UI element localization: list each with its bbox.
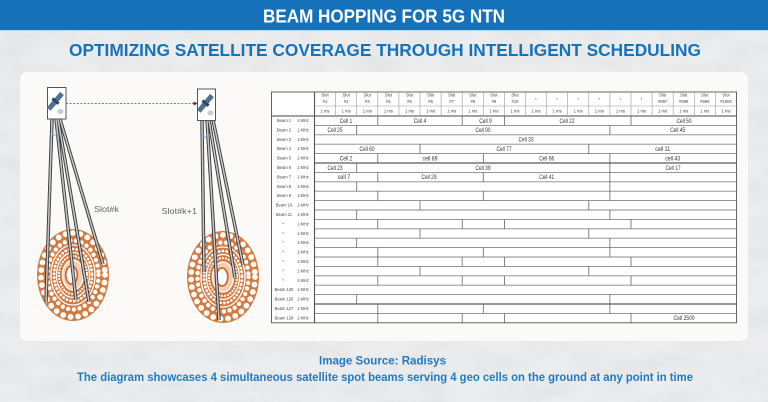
table cell assignments: Cell 60 <box>360 147 375 153</box>
table header: slots: 1 ms <box>595 108 604 114</box>
table header: slots: #1000 <box>720 99 732 104</box>
table cell assignments: Cell 41 <box>539 175 555 181</box>
arrow: satellite movement <box>66 102 198 106</box>
table row labels: beams: 1 MHz <box>297 156 309 161</box>
table header: slots: 1 ms <box>679 108 688 114</box>
table header: slots: Slot <box>722 92 730 98</box>
caption: The diagram showcases 4 simultaneous satellite spot beams serving 4 geo cells on the ground at any point in time <box>77 372 693 384</box>
icon: satellite at slot k+1 <box>196 89 216 120</box>
table header: slots: 1 ms <box>489 108 498 114</box>
table header: slots: 1 ms <box>342 108 351 114</box>
table header: slots: #4 <box>386 99 391 104</box>
table header: slots <box>320 92 732 114</box>
table cell assignments: Cell 1 <box>340 119 353 125</box>
table row labels: beams: 1 MHz <box>297 221 309 226</box>
table cell assignments: Cell 66 <box>539 156 555 162</box>
panel: satellite coverage diagram <box>37 88 259 323</box>
table row labels: beams: Beam 3 <box>277 137 292 142</box>
table row labels: beams: Beam 5 <box>277 156 292 161</box>
satellite caption right: SAT <box>201 134 212 140</box>
table header: slots: 1 ms <box>616 108 625 114</box>
table row labels: beams: 1 MHz <box>297 231 309 236</box>
table header: slots: #7 <box>449 99 455 104</box>
table cell assignments: Cell 22 <box>560 119 575 125</box>
table row labels: beams: Beam 125 <box>275 287 294 292</box>
beams: slot k+1 <box>202 120 243 320</box>
table row labels: beams: 1 MHz <box>297 259 309 264</box>
table cell assignments: Cell 25 <box>328 128 343 134</box>
table cell assignments: cell 11 <box>655 147 671 153</box>
table cell assignments <box>328 119 695 322</box>
table header: slots: 1 ms <box>363 108 372 114</box>
table cell assignments: Cell 2 <box>340 156 353 162</box>
table cell assignments: cell 7 <box>338 175 351 181</box>
table row labels: beams: 1 MHz <box>297 193 309 198</box>
table row labels: beams: Beam 10 <box>276 203 293 208</box>
table cell assignments: cell 43 <box>665 156 681 162</box>
table row labels: beams: 1 MHz <box>297 297 309 302</box>
table row labels: beams: 1 MHz <box>297 184 309 189</box>
table header: slots: Slot <box>680 92 688 98</box>
table header: slots: * <box>641 97 643 102</box>
table header: slots: Slot <box>511 92 519 98</box>
table header: slots: 1 ms <box>426 108 435 114</box>
table header: slots: 1 ms <box>320 108 330 114</box>
table cell assignments: Cell 33 <box>518 138 534 144</box>
table header: slots: 1 ms <box>637 108 646 114</box>
table header: slots: #999 <box>700 99 710 104</box>
table header: slots: 1 ms <box>447 108 456 114</box>
table header: slots: Slot <box>385 92 393 98</box>
table header: slots: 1 ms <box>721 108 731 114</box>
table cell assignments: Cell 9 <box>479 119 492 125</box>
table header: slots: Slot <box>701 92 709 98</box>
table cell assignments: Cell 2500 <box>674 316 695 322</box>
table header: slots: Slot <box>659 92 667 98</box>
table row labels: beams: Beam 4 <box>277 146 292 151</box>
table row labels: beams: 1 MHz <box>297 127 309 132</box>
table header: slots: Slot <box>448 92 456 98</box>
table header: slots: * <box>598 97 600 102</box>
table row labels: beams: Beam 1 <box>277 118 292 123</box>
table header: slots: 1 ms <box>468 108 477 114</box>
table header: slots: Slot <box>343 92 351 98</box>
icon: satellite at slot k <box>46 88 66 119</box>
table header: slots: 1 ms <box>574 108 583 114</box>
table row labels: beams: Beam 8 <box>277 184 292 189</box>
table header: slots: Slot <box>364 92 372 98</box>
table row labels: beams: 1 MHz <box>297 250 309 255</box>
table row labels: beams: 1 MHz <box>297 118 309 123</box>
table row labels: beams: * <box>282 231 284 236</box>
table row labels: beams: 1 MHz <box>297 203 309 208</box>
table row labels: beams: 1 MHz <box>297 268 309 273</box>
table header: slots: * <box>535 97 537 102</box>
table header: slots: #10 <box>512 99 519 104</box>
table header: slots: Slot <box>490 92 498 98</box>
table header: slots: * <box>577 97 579 102</box>
table header: slots: #997 <box>658 99 668 104</box>
satellite caption left: SAT <box>51 132 62 138</box>
table row labels: beams: * <box>282 221 284 226</box>
table row labels: beams: * <box>282 250 284 255</box>
table row labels: beams: Beam 11 <box>276 212 293 217</box>
cell map: slot k+1 <box>187 231 259 323</box>
table header: slots: #1 <box>323 99 328 104</box>
table row labels: beams: * <box>282 278 284 283</box>
table row labels: beams: Beam 127 <box>275 306 294 311</box>
table row labels: beams: 1 MHz <box>297 315 309 320</box>
table cell assignments: Cell 77 <box>496 147 512 153</box>
subtitle: OPTIMIZING SATELLITE COVERAGE THROUGH INTELLIGENT SCHEDULING <box>69 40 701 60</box>
table cell assignments: Cell 23 <box>328 166 343 172</box>
table row labels: beams: * <box>282 240 284 245</box>
image source line: Image Source: Radisys <box>319 356 446 368</box>
beams: slot k <box>46 119 103 302</box>
table row labels: beams: Beam 126 <box>275 297 294 302</box>
table header: slots: #2 <box>344 99 349 104</box>
table row labels: beams: 1 MHz <box>297 146 309 151</box>
table row labels: beams: 1 MHz <box>297 165 309 170</box>
table header: slots: #9 <box>492 99 497 104</box>
table row labels: beams: * <box>282 268 284 273</box>
table header: slots: * <box>620 97 622 102</box>
chart: beam hopping schedule table <box>272 92 736 323</box>
table row labels: beams: 1 MHz <box>297 212 309 217</box>
table cell assignments: Cell 17 <box>666 166 681 172</box>
table header: slots: #998 <box>679 99 689 104</box>
header bar <box>0 0 768 31</box>
table header: slots: Slot <box>427 92 435 98</box>
table header: slots: 1 ms <box>531 108 541 114</box>
table row labels: beams: Beam 6 <box>277 165 292 170</box>
table header: slots: #8 <box>470 99 476 104</box>
table cell assignments: Cell 50 <box>676 119 692 125</box>
table row labels: beams <box>275 118 309 320</box>
table cell assignments: Cell 4 <box>414 119 427 125</box>
table row labels: beams: 1 MHz <box>297 287 309 292</box>
table cell assignments: Cell 39 <box>476 166 491 172</box>
table cell assignments: cell 89 <box>422 156 438 162</box>
table row labels: beams: 1 MHz <box>297 137 309 142</box>
panel: diagram card <box>20 72 748 341</box>
table row labels: beams: Beam 7 <box>277 174 292 179</box>
table row labels: beams: Beam 9 <box>277 193 292 198</box>
table row labels: beams: 1 MHz <box>297 306 309 311</box>
label: slot k+1: Slot#k+1 <box>162 206 197 216</box>
header bar: BEAM HOPPING FOR 5G NTN <box>263 7 505 27</box>
table header: slots: Slot <box>406 92 414 98</box>
table header: slots: #3 <box>365 99 370 104</box>
table row labels: beams: Beam 2 <box>277 127 292 132</box>
table header: slots: #6 <box>428 99 434 104</box>
table cell assignments: Cell 90 <box>476 128 491 134</box>
label: slot k: Slot#k <box>94 204 120 214</box>
table header: slots: 1 ms <box>510 108 520 114</box>
table header: slots: Slot <box>469 92 477 98</box>
table header: slots: #5 <box>407 99 412 104</box>
table cell assignments: Cell 45 <box>670 128 686 134</box>
table header: slots: 1 ms <box>553 108 562 114</box>
table header: slots: * <box>556 97 558 102</box>
table row labels: beams: 1 MHz <box>297 278 309 283</box>
cell map: slot k <box>37 229 109 321</box>
table grid <box>272 92 736 323</box>
table row labels: beams: Beam 128 <box>275 315 294 320</box>
table header: slots: 1 ms <box>700 108 709 114</box>
table header: slots: 1 ms <box>405 108 414 114</box>
table row labels: beams: 1 MHz <box>297 240 309 245</box>
table row labels: beams: 1 MHz <box>297 174 309 179</box>
table row labels: beams: * <box>282 259 284 264</box>
table cell assignments: Cell 29 <box>422 175 437 181</box>
table header: slots: 1 ms <box>384 108 393 114</box>
table header: slots: Slot <box>321 92 329 98</box>
table header: slots: 1 ms <box>658 108 667 114</box>
